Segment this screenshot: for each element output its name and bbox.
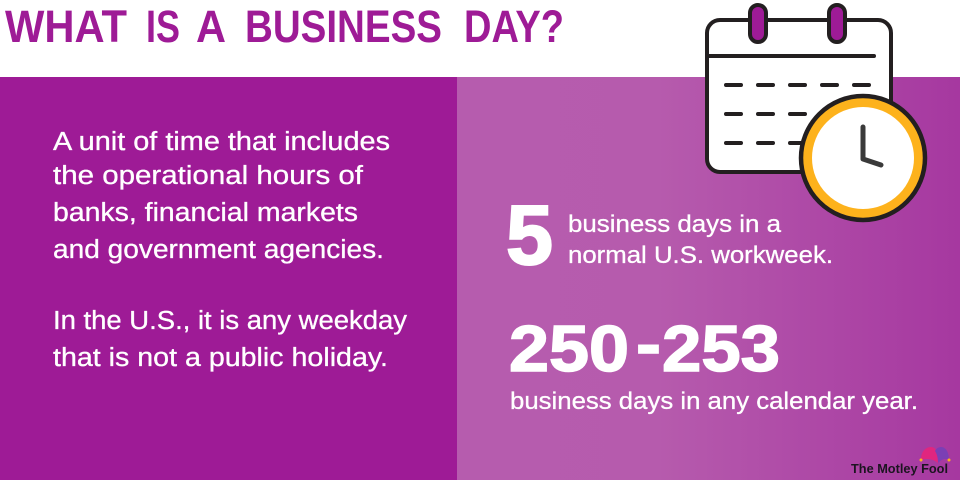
jester hat [920,447,950,463]
calendar page [707,20,891,172]
stat: 5 business days: 5 [506,188,553,282]
stat: 250-253 business days: 250 [509,312,629,385]
title: WHAT [5,1,127,52]
icon: calendar with clock [707,5,925,220]
stat: 250-253 business days: 253 [662,312,780,385]
definition text: banks, financial markets [53,199,358,227]
title: IS [146,1,180,52]
calendar rings [750,5,845,42]
title: DAY? [464,1,564,52]
title: A [196,1,226,52]
definition text [53,128,407,372]
definition text: and government agencies. [53,236,384,264]
stat: 5 business days [506,188,833,282]
stat: 5 business days: business days in a [568,211,781,238]
logo: The Motley Fool [851,447,950,476]
title: BUSINESS [245,1,442,52]
stat: 5 business days: normal U.S. workweek. [568,242,833,269]
definition text: In the U.S., it is any weekday [53,307,407,335]
definition text: A unit of time that includes [53,128,390,156]
definition text: that is not a public holiday. [53,344,388,372]
stat: 250-253 business days [509,307,918,415]
panel: definition [0,77,457,480]
panel: statistics [457,77,960,480]
calendar rows [707,56,874,143]
clock [801,96,925,220]
definition text: the operational hours of [53,162,364,190]
stat: 250-253 business days: business days in any calendar year. [510,388,918,415]
title [5,1,564,52]
logo: The Motley Fool: The Motley Fool [851,461,948,476]
stat: 250-253 business days: - [636,307,661,380]
